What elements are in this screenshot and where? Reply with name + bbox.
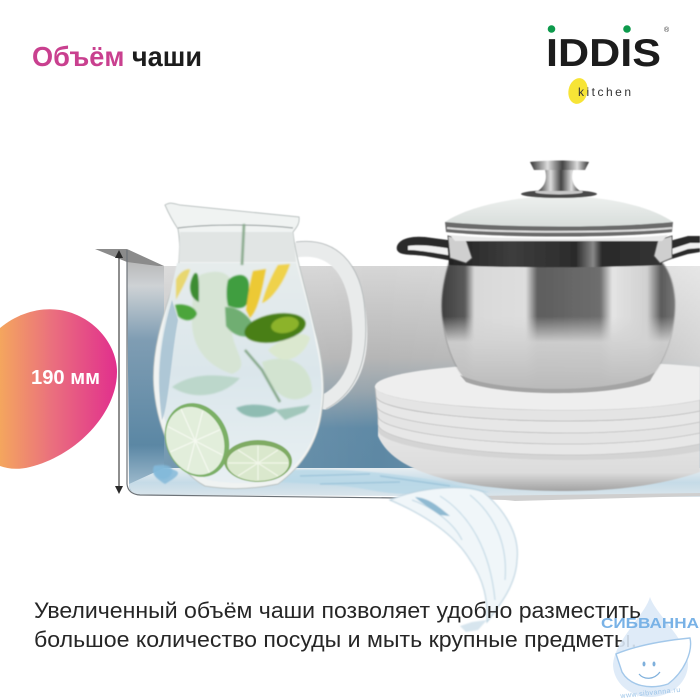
lid rim highlight xyxy=(447,228,672,232)
jug handle edge xyxy=(296,241,366,409)
lemon pieces xyxy=(246,269,266,318)
lime slice large xyxy=(153,393,241,487)
height blob xyxy=(0,309,117,469)
plate layer 1 xyxy=(376,396,700,433)
pot dark band xyxy=(447,240,662,267)
left handle highlight xyxy=(408,245,466,258)
jug water xyxy=(159,263,322,483)
logo: IDDIS kitchen: ® xyxy=(664,26,670,34)
jug xyxy=(153,203,366,489)
pot rivets right xyxy=(654,236,672,263)
lower sink rim xyxy=(400,493,700,501)
knob neck xyxy=(538,170,580,191)
lime slice small xyxy=(224,440,292,482)
title: Объём чаши xyxy=(32,41,202,72)
watermark url: www.sibvanna.ru xyxy=(619,687,681,700)
sink outline xyxy=(127,250,400,498)
knob xyxy=(521,160,597,198)
description text xyxy=(34,598,641,652)
plates stack xyxy=(375,362,700,491)
glass lid xyxy=(445,196,673,226)
logo: IDDIS kitchen: kitchen xyxy=(578,85,631,99)
pot rivets xyxy=(448,236,472,263)
pale leaves xyxy=(192,272,241,374)
stem xyxy=(242,224,280,402)
lid chrome ledge xyxy=(450,235,668,241)
jug water splash xyxy=(154,465,172,479)
green leaves xyxy=(226,275,249,308)
watermark drop xyxy=(613,597,688,697)
jug contents xyxy=(172,224,312,420)
plate layer 4 xyxy=(378,424,700,460)
left handle dark loop xyxy=(397,237,470,264)
logo: IDDIS kitchen: IDDIS xyxy=(546,32,661,75)
description text: Увеличенный объём чаши позволяет удобно разместить xyxy=(34,598,641,623)
knob base shine xyxy=(535,190,583,194)
pot base xyxy=(460,372,655,393)
water stream xyxy=(390,488,517,632)
lid rim xyxy=(445,222,673,236)
sink back wall xyxy=(164,266,700,469)
watermark name: СИБВАННА xyxy=(601,615,699,632)
height value: 190 мм xyxy=(31,367,100,389)
pot xyxy=(397,160,700,393)
jug neck shadow xyxy=(178,232,296,262)
right handle dark loop xyxy=(655,236,700,264)
top plate xyxy=(375,362,700,410)
water on sink floor xyxy=(153,466,490,495)
plate layer 2 xyxy=(377,406,700,444)
bottom plate xyxy=(378,430,700,491)
description text: большое количество посуды и мыть крупные предметы. xyxy=(34,627,637,652)
pot body fade xyxy=(442,262,675,391)
knob cap xyxy=(530,160,589,170)
plate layer 3 xyxy=(378,416,700,455)
jug left blue tint xyxy=(159,300,178,420)
left handle xyxy=(397,237,470,264)
knob base xyxy=(521,190,597,198)
plate rim xyxy=(375,386,700,421)
sink cross-section xyxy=(95,249,700,501)
watermark: Sibvanna xyxy=(601,597,699,700)
logo: IDDIS kitchen xyxy=(546,25,670,106)
jug rim band xyxy=(178,225,293,228)
watermark bathtub xyxy=(616,638,691,687)
sink flange xyxy=(95,249,164,266)
sink wall highlight xyxy=(164,266,700,469)
right handle highlight xyxy=(662,243,700,258)
jug glass xyxy=(153,203,324,489)
pot body xyxy=(442,262,675,391)
jug handle xyxy=(296,249,360,402)
dark lime xyxy=(242,309,308,347)
dimension arrow xyxy=(115,250,123,494)
watermark face xyxy=(639,662,660,678)
sink floor xyxy=(129,468,700,497)
right handle xyxy=(655,236,700,264)
sink left wall xyxy=(127,258,164,492)
